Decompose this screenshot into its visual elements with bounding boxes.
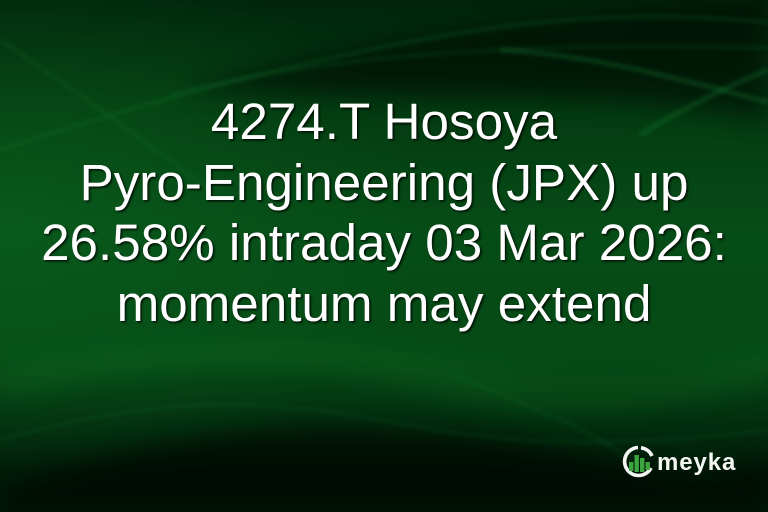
- title: Pyro-Engineering (JPX) up: [80, 154, 688, 211]
- wordmark: meyka: [657, 449, 736, 476]
- title: 4274.T Hosoya: [211, 93, 557, 150]
- title: 26.58% intraday 03 Mar 2026:: [41, 214, 727, 271]
- title: [41, 93, 727, 334]
- title: momentum may extend: [117, 275, 651, 332]
- icon: ring with bars: [625, 448, 652, 475]
- logo: meyka: [622, 446, 736, 478]
